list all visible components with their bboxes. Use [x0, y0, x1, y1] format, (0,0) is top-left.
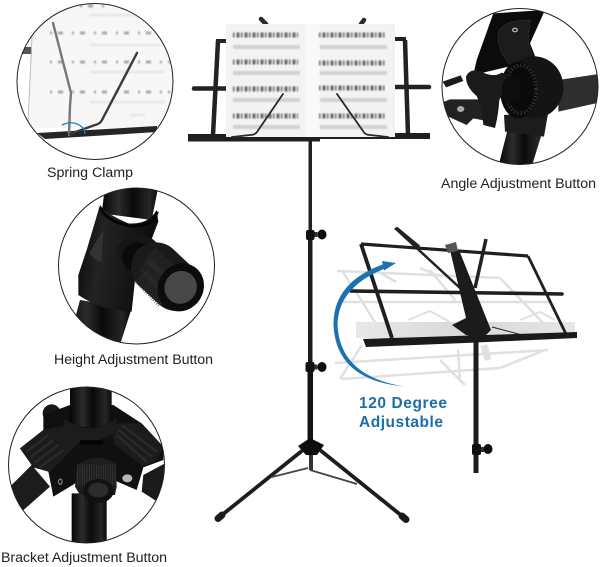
- central bracket: [450, 250, 491, 338]
- heading: 120 degree adjustable: Adjustable: [359, 414, 443, 431]
- heading: 120 degree adjustable: [359, 395, 447, 431]
- detail circle: bracket adjustment: [8, 387, 167, 547]
- tray: [188, 133, 430, 142]
- detail circle: spring clamp: [17, 3, 173, 160]
- ghost positions: [335, 268, 575, 385]
- pole: [474, 335, 478, 473]
- rotation arrow: [333, 261, 404, 386]
- sheet music: [226, 24, 395, 137]
- icon: rotation arrow: [62, 123, 85, 134]
- sheet clamps: [232, 94, 388, 137]
- label: height adjustment: Height Adjustment Button: [54, 352, 213, 368]
- label: angle adjustment: Angle Adjustment Button: [441, 176, 596, 192]
- label: spring clamp: Spring Clamp: [47, 165, 133, 181]
- top clips: [261, 19, 364, 24]
- rear arms: [395, 228, 486, 288]
- side frame: [194, 39, 429, 135]
- heading: 120 degree adjustable: 120 Degree: [359, 395, 447, 412]
- folded stand with rotation ghosts: [333, 228, 577, 473]
- tripod legs: [218, 438, 406, 520]
- stand pole: [308, 140, 313, 470]
- height knob lower: [306, 362, 326, 372]
- knob: [472, 444, 492, 455]
- main music stand: [188, 19, 430, 520]
- tray: [363, 332, 577, 347]
- label: bracket adjustment: Bracket Adjustment Button: [1, 550, 167, 566]
- detail circle: height adjustment: [58, 187, 215, 350]
- metal frame: [351, 244, 566, 338]
- height knob upper: [306, 230, 326, 240]
- detail circle: angle adjustment: [442, 8, 600, 167]
